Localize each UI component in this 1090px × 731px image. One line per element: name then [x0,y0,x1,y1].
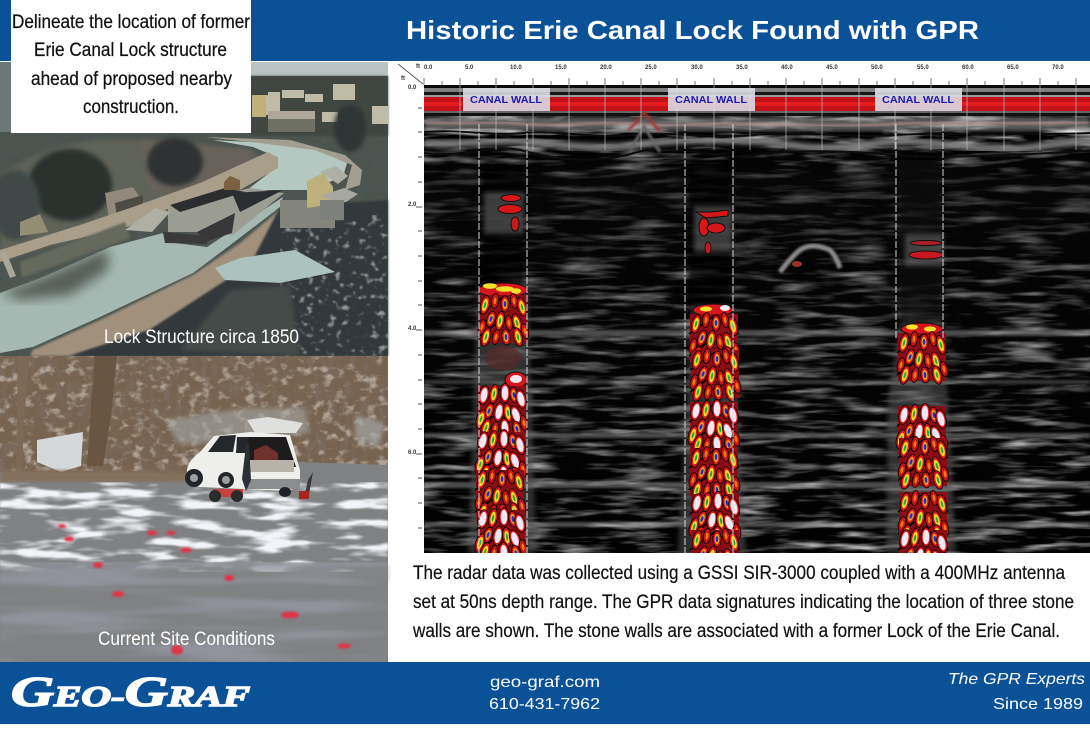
wall 2 signature [678,160,746,582]
radargram distance axis: 0.0 [424,65,433,71]
red survey marks [58,524,351,655]
website and phone: geo-graf.com [490,674,600,691]
deep brighter banding [424,330,1090,527]
radargram distance axis: 5.0 [465,65,474,71]
radargram distance axis: 45.0 [826,65,838,71]
white trace lines [460,85,1076,150]
header bar [0,0,1090,61]
tagline: Since 1989 [993,696,1083,713]
radargram distance axis: 20.0 [600,65,612,71]
photo: current site conditions [0,356,388,662]
objective box: construction. [83,97,179,118]
description paragraph [412,563,1074,642]
far bank and foliage [30,207,300,356]
radargram distance axis: 25.0 [645,65,657,71]
objective box: ahead of proposed nearby [31,69,232,90]
mill buildings [280,200,335,228]
surface black lines and red band [424,85,1090,88]
caption: current site conditions: Current Site Conditions [98,629,275,650]
dashed wall boundaries [479,124,943,553]
radargram distance axis: 30.0 [691,65,703,71]
hyperbola reflector [628,112,840,272]
canal wall labels [463,88,962,111]
canal wall labels: CANAL WALL [470,94,543,106]
caption: lock structure circa 1850: Lock Structure circa 1850 [104,327,299,348]
radargram distance axis: ft [416,64,420,70]
logo: Geo-Graf: G EO- G RAF [11,670,250,716]
objective box [11,0,251,133]
GPR radargram [424,85,1090,582]
radargram distance axis: 60.0 [962,65,974,71]
wall 3 signature [886,160,956,582]
title: Historic Erie Canal Lock Found with GPR [406,15,979,45]
canal wall labels: CANAL WALL [675,94,748,106]
tow path [0,152,278,262]
photo: lock structure circa 1850 [0,62,388,356]
radargram depth axis: 2.0 [408,202,417,208]
tagline [948,671,1085,713]
shallow grey reflectors [424,117,1090,131]
radargram distance axis: 15.0 [555,65,567,71]
canal wall labels: CANAL WALL [882,94,955,106]
lock walls [168,188,284,235]
radargram distance axis: 70.0 [1052,65,1064,71]
radargram distance axis: 10.0 [510,65,522,71]
radargram distance axis [398,64,1076,85]
website and phone [489,674,600,713]
upper canal water [213,140,347,190]
radargram distance axis: 55.0 [917,65,929,71]
pond [215,250,335,283]
radargram depth axis: 0.0 [408,85,417,91]
radargram depth axis [408,85,422,528]
radargram distance axis: ft [401,76,405,82]
objective box: Erie Canal Lock structure [34,40,227,61]
radargram distance axis: 50.0 [871,65,883,71]
tagline: The GPR Experts [948,671,1085,688]
footer bar [0,662,1090,724]
wall 1 signature [468,165,536,562]
website and phone: 610-431-7962 [489,696,600,713]
objective box: Delineate the location of former [12,12,251,33]
survey vehicle [185,417,303,497]
GPR cart [209,445,313,502]
radargram depth axis: 4.0 [408,326,417,332]
lower canal water [0,197,283,353]
radargram distance axis: 40.0 [781,65,793,71]
radargram distance axis: 65.0 [1007,65,1019,71]
radargram depth axis: 6.0 [408,450,417,456]
radargram distance axis: 35.0 [736,65,748,71]
